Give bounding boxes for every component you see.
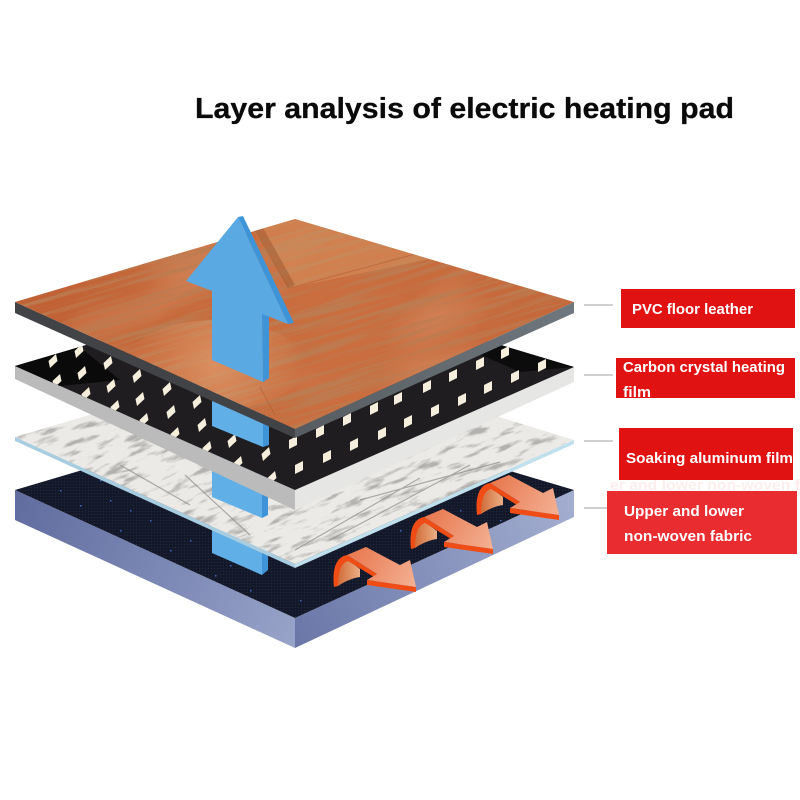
layer: carbon crystal heating film [15,340,574,510]
leader line: carbon [584,374,613,376]
blue arrow shaft: upper segment [212,380,269,447]
ghost text behind label: er and lower non-woven f [610,477,800,494]
label: soaking aluminum film [619,428,793,480]
label: carbon crystal heating film: Carbon crystal heating [623,360,785,376]
heat arrow: left [334,547,416,592]
layer: non-woven fabric base [15,407,574,648]
label: carbon crystal heating film: film [623,385,651,401]
leader line: aluminum [584,440,613,442]
layer: PVC floor leather [15,219,574,438]
arrow shadow on wood [253,226,295,288]
label: upper and lower non-woven fabric: non-woven fabric [624,529,752,545]
heat arrows [334,475,559,592]
label: PVC floor leather [621,289,795,328]
label: upper and lower non-woven fabric: Upper and lower [624,504,744,520]
title: Layer analysis of electric heating pad [195,93,734,125]
heat arrow: middle [411,509,493,554]
blue arrow head and shaft above the floor [186,216,294,382]
label: carbon crystal heating film [616,358,795,401]
heating element diamonds [48,344,546,485]
heat arrow: right [477,475,559,520]
label: PVC floor leather: PVC floor leather [632,302,753,318]
leader line: PVC [584,304,613,306]
leader line: fabric [584,507,608,509]
label: soaking aluminum film: Soaking aluminum film [626,451,793,467]
label: upper and lower non-woven fabric [607,491,797,554]
layer: soaking aluminum film [15,412,574,568]
blue arrow shaft: lower segment [212,500,268,575]
blue arrow shaft: middle segment [212,440,268,518]
